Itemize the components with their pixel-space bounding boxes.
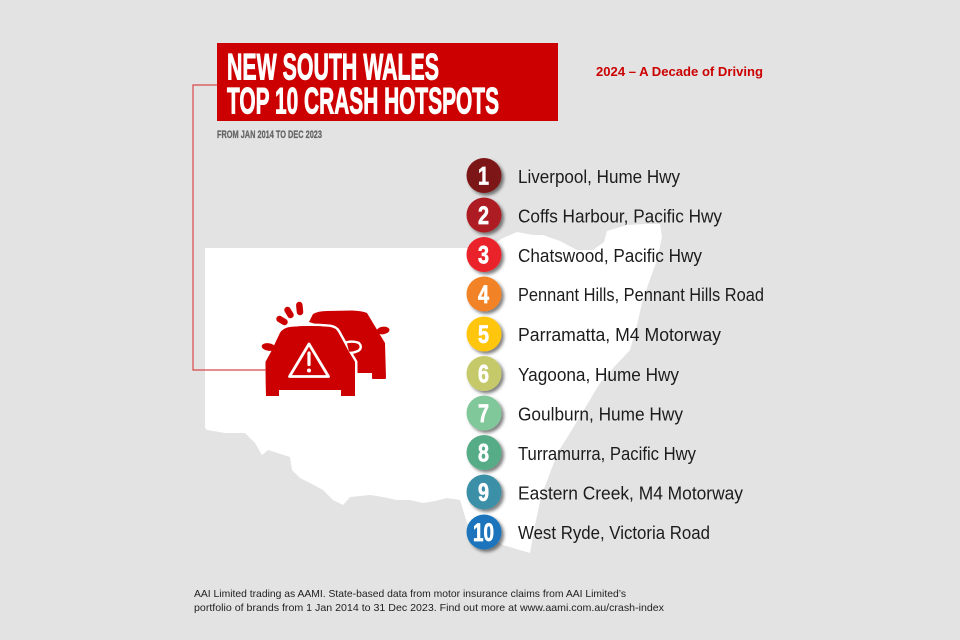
item 4: Pennant Hills, Pennant Hills Road <box>518 285 764 305</box>
report tag line: 2024 – A Decade of Driving <box>596 64 763 79</box>
icon: crashed cars with warning triangle <box>261 305 390 396</box>
item 1: Liverpool, Hume Hwy <box>518 167 680 187</box>
item 1: 1 <box>478 162 489 190</box>
footer disclaimer: AAI Limited trading as AAMI. State-based data from motor insurance claims from AAI Limited’s <box>194 588 626 600</box>
item 8: 8 <box>478 440 489 468</box>
item 9 <box>466 474 743 510</box>
item 3: Chatswood, Pacific Hwy <box>518 246 702 266</box>
item 2 <box>466 198 722 232</box>
item 3 <box>466 237 702 272</box>
item 10 <box>466 514 710 550</box>
title banner <box>217 43 558 122</box>
item 3: 3 <box>478 242 489 270</box>
item 10: 10 <box>473 519 494 547</box>
item 7: 7 <box>478 400 489 428</box>
item 6: Yagoona, Hume Hwy <box>518 365 679 385</box>
item 7 <box>466 396 683 430</box>
title banner: TOP 10 CRASH HOTSPOTS <box>227 80 499 122</box>
icon: front car <box>266 326 360 396</box>
item 6: 6 <box>478 360 489 388</box>
footer disclaimer: portfolio of brands from 1 Jan 2014 to 31 Dec 2023. Find out more at www.aami.com.au/crash-index <box>194 602 665 614</box>
item 9: Eastern Creek, M4 Motorway <box>518 484 743 504</box>
ranked list of hotspots <box>466 158 764 550</box>
icon: impact sparks <box>280 305 300 322</box>
map: New South Wales silhouette <box>205 224 662 553</box>
item 8: Turramurra, Pacific Hwy <box>518 444 696 464</box>
icon: rear car <box>309 310 390 379</box>
item 5: 5 <box>478 321 489 349</box>
subtitle: date range: FROM JAN 2014 TO DEC 2023 <box>217 129 322 141</box>
title banner: NEW SOUTH WALES <box>227 46 439 88</box>
item 2: 2 <box>478 202 489 230</box>
item 1 <box>466 158 680 193</box>
item 4: 4 <box>478 281 489 309</box>
item 9: 9 <box>478 479 489 507</box>
icon: warning triangle <box>290 344 328 376</box>
footer disclaimer <box>194 588 665 614</box>
item 5 <box>466 316 721 352</box>
item 10: West Ryde, Victoria Road <box>518 523 710 543</box>
item 4 <box>466 276 764 312</box>
item 5: Parramatta, M4 Motorway <box>518 325 721 345</box>
item 6 <box>466 356 679 391</box>
item 8 <box>466 435 696 470</box>
connector line from title to car icon <box>193 85 266 370</box>
item 2: Coffs Harbour, Pacific Hwy <box>518 206 722 226</box>
item 7: Goulburn, Hume Hwy <box>518 404 683 424</box>
